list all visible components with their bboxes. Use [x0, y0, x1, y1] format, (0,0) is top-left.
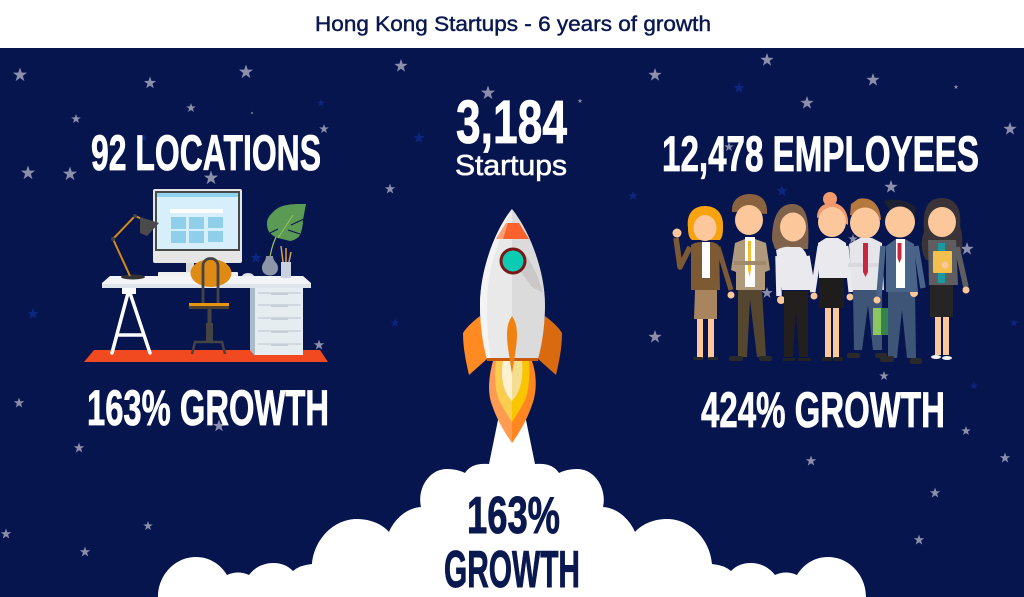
- left fin: [463, 316, 487, 375]
- title: Hong Kong Startups - 6 years of growth: [315, 13, 711, 36]
- exhaust cloud: [158, 420, 866, 597]
- monitor: [153, 189, 242, 273]
- person 1: [672, 206, 734, 360]
- person 3: [772, 204, 813, 361]
- drawers: [250, 288, 303, 356]
- chair: [189, 258, 232, 354]
- icon: office desk: [84, 189, 328, 362]
- person 6: [874, 200, 923, 364]
- icon: rocket: [463, 209, 562, 443]
- rocket center fin: [507, 316, 517, 374]
- pen cup: [281, 246, 291, 278]
- right fin: [538, 316, 562, 375]
- green bag: [873, 308, 888, 335]
- rocket window: [500, 248, 526, 274]
- person 7: [922, 198, 970, 360]
- illustration: team of employees: [672, 192, 970, 364]
- rug: [84, 350, 328, 362]
- rocket body: [480, 209, 545, 361]
- mouse: [242, 273, 254, 281]
- desk legs: [112, 288, 150, 353]
- person 2: [729, 194, 772, 361]
- flame: [489, 361, 536, 443]
- heading: 3,184: 3,184: [456, 88, 567, 156]
- rocket nose band: [496, 223, 529, 239]
- heading: location growth: 163% GROWTH: [87, 380, 329, 436]
- person 4: [810, 192, 854, 361]
- person 5: [847, 198, 887, 358]
- title bar: [0, 0, 1024, 48]
- desk top: [102, 276, 311, 288]
- heading: cloud 163%: 163%: [467, 487, 560, 545]
- subheading: startups: Startups: [455, 150, 567, 182]
- keyboard: [158, 272, 238, 283]
- heading: 92 locations: 92 LOCATIONS: [91, 125, 321, 181]
- desk lamp: [111, 214, 159, 280]
- plant: [262, 204, 306, 276]
